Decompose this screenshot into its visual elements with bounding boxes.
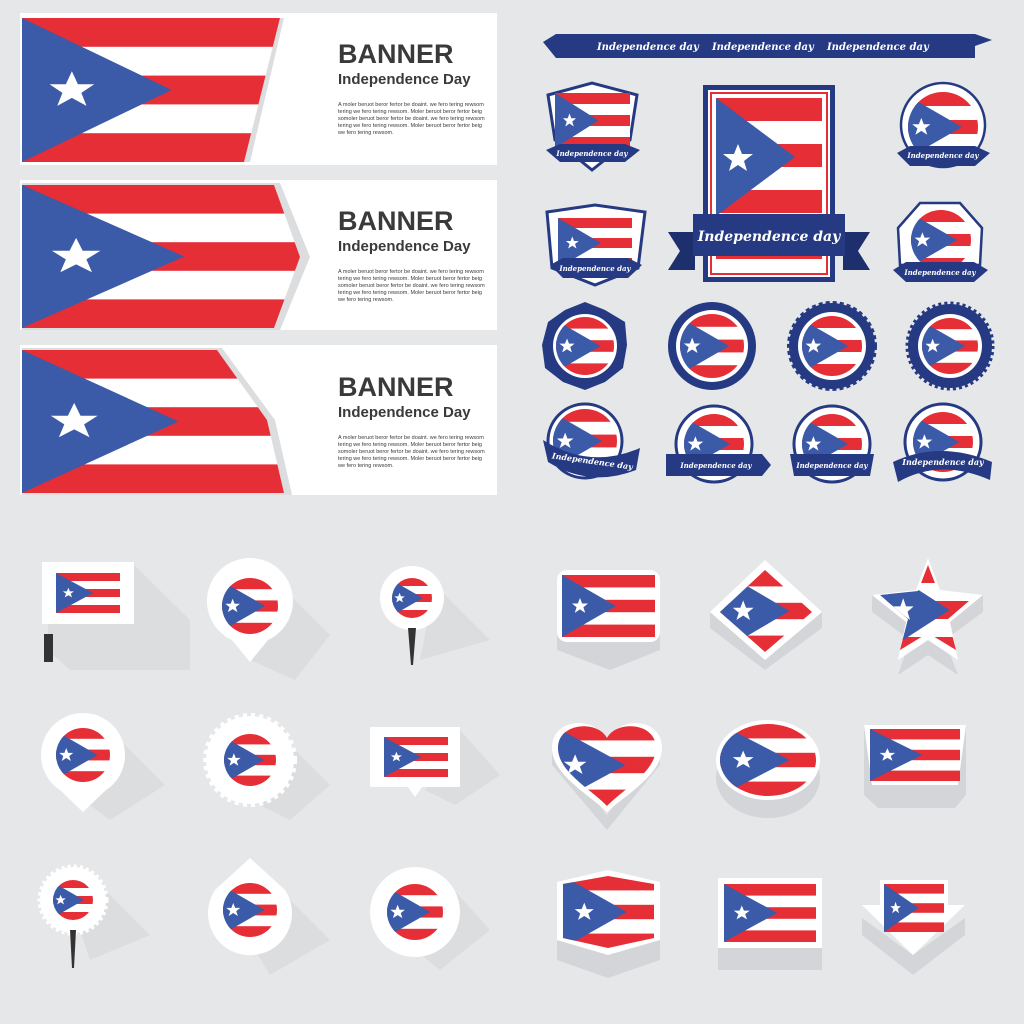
icon: pointer pin	[41, 713, 165, 820]
banner 2 text: tering we fero tering rewsom. Moler beruot beror fertor beig	[338, 290, 482, 296]
banner 1 text: BANNER	[338, 39, 454, 69]
badge: scalloped 1	[897, 82, 990, 168]
text: Independence day	[795, 461, 869, 470]
banner 3 text: A moler beruot beror fertor be doaint. we fero tering rewsom	[338, 435, 484, 441]
round badges row 4: Independence day	[550, 450, 635, 472]
icon: seal pin	[40, 867, 150, 968]
icon: flag on stick	[42, 562, 190, 670]
icon: round tag	[370, 867, 490, 970]
banner 3	[20, 345, 497, 495]
banner 2 text: Independence Day	[338, 238, 471, 255]
banner 1 text: tering we fero tering rewsom. Moler beruot beror fertor beig	[338, 109, 482, 115]
banner 3 text: Independence Day	[338, 404, 471, 421]
text: Independence day	[679, 461, 753, 470]
top ribbon: Independence day	[596, 42, 700, 53]
banner 1 text: somoler beruot beror fertor be doaint. we fero tering rewsom	[338, 116, 485, 122]
badge: shield 2	[547, 205, 645, 285]
top ribbon	[543, 34, 992, 58]
3d: diamond	[710, 560, 822, 670]
banner 2 text: tering we fero tering rewsom. Moler beruot beror fertor beig	[338, 276, 482, 282]
banner 2 text: A moler beruot beror fertor be doaint. we fero tering rewsom	[338, 269, 484, 275]
3d: rectangle	[718, 878, 822, 970]
banner 2 text: we fero tering rewsom.	[337, 297, 394, 303]
banner 2 text: somoler beruot beror fertor be doaint. we fero tering rewsom	[338, 283, 485, 289]
3d: arrow	[862, 880, 965, 975]
3d: hexagon shield	[557, 870, 660, 978]
banner 3 text: tering we fero tering rewsom. Moler beruot beror fertor beig	[338, 456, 482, 462]
top ribbon: Independence day	[711, 42, 815, 53]
banner 1 text: tering we fero tering rewsom. Moler beruot beror fertor beig	[338, 123, 482, 129]
badge: shield 1: Independence day	[555, 149, 629, 158]
central flag frame: Independence day	[697, 229, 841, 245]
badge: shield 2: Independence day	[558, 264, 632, 273]
banner 2 text	[337, 206, 485, 303]
banner 1 text: A moler beruot beror fertor be doaint. we fero tering rewsom	[338, 102, 484, 108]
bottom-left icons	[40, 558, 500, 975]
banner 1 text: Independence Day	[338, 71, 471, 88]
icon: drop pin	[208, 858, 330, 975]
banner 3 text: BANNER	[338, 372, 454, 402]
badge: shield 1	[546, 83, 640, 170]
icon: round pin	[207, 558, 330, 680]
banner 3 text: we fero tering rewsom.	[337, 463, 394, 469]
icon: seal	[206, 716, 330, 820]
badge: octagon	[893, 203, 995, 282]
banner 2 text: BANNER	[338, 206, 454, 236]
banner 1 text: we fero tering rewsom.	[337, 130, 394, 136]
banner 3 text: tering we fero tering rewsom. Moler beruot beror fertor beig	[338, 442, 482, 448]
banner 2	[20, 180, 497, 330]
badge: octagon: Independence day	[903, 268, 977, 277]
round badges row 4	[543, 404, 643, 478]
3d: star	[872, 558, 983, 675]
top ribbon: Independence day	[826, 42, 930, 53]
central ribbon	[668, 232, 695, 270]
icon: rect callout	[370, 727, 500, 805]
banner 3 text	[337, 372, 485, 469]
badge: scalloped 1: Independence day	[906, 151, 980, 160]
central flag frame	[668, 85, 870, 282]
3d: heart	[552, 723, 662, 830]
3d: oval	[716, 720, 820, 818]
banner 1	[20, 13, 497, 165]
round badges row 3	[542, 302, 627, 390]
banner 1 text	[337, 39, 485, 136]
bottom-right 3D shapes	[550, 558, 1000, 978]
icon: push pin	[380, 566, 490, 665]
text: Independence day	[901, 457, 985, 467]
3d: rounded square	[557, 570, 660, 670]
3d: shield	[864, 725, 966, 808]
banner 3 text: somoler beruot beror fertor be doaint. we fero tering rewsom	[338, 449, 485, 455]
